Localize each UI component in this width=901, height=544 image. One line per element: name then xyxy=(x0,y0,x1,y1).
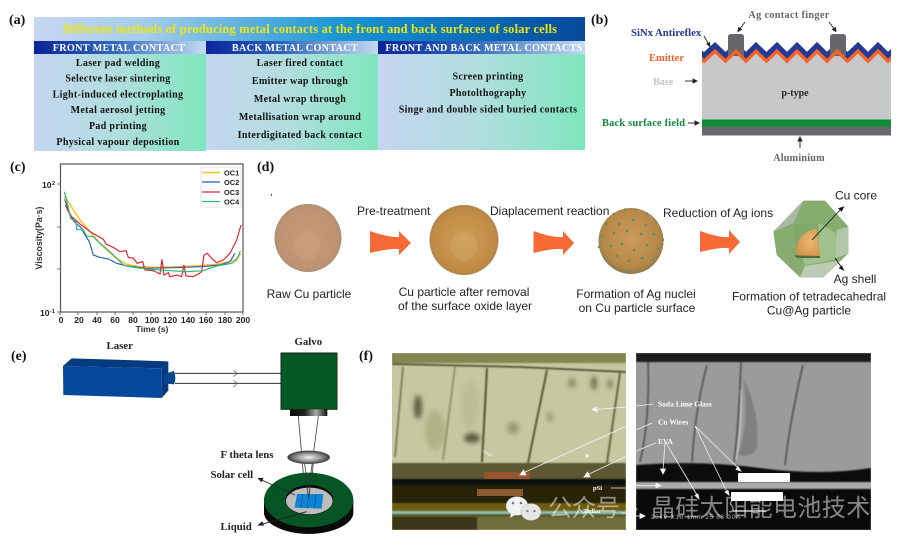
column: front metal contact: Pad printing xyxy=(89,121,147,132)
particle captions: Cu particle after removal xyxy=(399,285,529,299)
column: back metal contact: Metallisation wrap around xyxy=(239,112,361,123)
plot frame and ticks xyxy=(57,164,243,315)
column: back metal contact: BACK METAL CONTACT xyxy=(232,43,358,54)
column: back metal contact: Interdigitated back contact xyxy=(238,130,363,141)
callout arrows on particle xyxy=(812,207,844,270)
contact fingers xyxy=(728,34,846,56)
panel: Cu@Ag particle formation xyxy=(267,187,886,318)
back surface field layer xyxy=(702,120,891,126)
curve OC3 xyxy=(65,205,241,277)
Cu wire cross-sections xyxy=(731,473,790,501)
x-axis tick labels: 80 xyxy=(128,315,138,325)
label: Back surface field: Back surface field xyxy=(602,118,685,129)
particle captions: of the surface oxide layer xyxy=(398,299,532,313)
x-axis tick labels: 40 xyxy=(92,315,102,325)
column: back metal contact: Metal wrap through xyxy=(254,94,346,105)
chart legend: OC2 xyxy=(224,178,239,187)
left image callouts xyxy=(519,406,626,514)
panel label: (a): (a) xyxy=(9,13,26,28)
panel label: (c): (c) xyxy=(10,160,26,175)
particle captions: Formation of tetradecahedral xyxy=(732,290,886,304)
setup labels: Liquid xyxy=(220,521,252,533)
column: front metal contact: Metal aerosol jetting xyxy=(71,105,165,116)
panel: viscosity chart xyxy=(34,164,250,334)
setup labels: Solar cell xyxy=(210,469,253,481)
image labels: Soda Lime Glass xyxy=(658,400,712,408)
callout arrows xyxy=(685,22,836,148)
label: pSi: pSi xyxy=(593,485,602,492)
right image callouts xyxy=(636,404,766,518)
table title band xyxy=(34,17,585,41)
x-axis tick labels: 140 xyxy=(181,315,195,325)
panel: methods table xyxy=(34,17,585,151)
particle captions: Ag shell xyxy=(834,272,876,286)
label: SiNx: SiNx Antireflex xyxy=(631,27,702,39)
particle captions: Cu core xyxy=(835,188,877,202)
label: Ag contact finger: Ag contact finger xyxy=(748,10,830,21)
converging beams xyxy=(298,416,318,498)
chart legend: OC1 xyxy=(224,168,239,178)
x-axis tick labels: 180 xyxy=(218,315,232,325)
chart legend: OC4 xyxy=(224,198,240,206)
image labels xyxy=(658,400,712,446)
panel label: (e): (e) xyxy=(11,349,27,364)
cleaned Cu particle xyxy=(430,205,498,275)
F theta lens xyxy=(287,451,330,464)
particle captions xyxy=(267,188,886,318)
icon: WeChat xyxy=(506,496,541,520)
setup labels: Laser xyxy=(106,340,133,352)
watermark text: 公众号 xyxy=(548,495,620,522)
image labels: EVA xyxy=(658,437,673,446)
setup labels: Galvo xyxy=(294,336,322,348)
y-axis tick labels: 10 xyxy=(40,308,50,318)
column: front and back metal contacts: Screen printing xyxy=(452,72,524,82)
arrow: reduction of Ag ions xyxy=(700,230,740,254)
tetradecahedral particle xyxy=(773,201,848,277)
aluminium layer xyxy=(702,126,891,136)
panel label: (f): (f) xyxy=(359,349,373,364)
stray tick mark: , xyxy=(270,187,273,198)
copper wires xyxy=(477,472,530,496)
stage callout arrows xyxy=(258,478,307,525)
chart legend: OC3 xyxy=(224,188,239,197)
chart legend xyxy=(201,167,241,207)
curve OC2 xyxy=(65,199,235,268)
y-axis tick labels: -1 xyxy=(50,309,55,315)
particle captions: Raw Cu particle xyxy=(267,287,352,301)
column: back metal contact: Emitter wap through xyxy=(252,76,348,87)
panel: laser setup xyxy=(63,336,353,534)
column: front and back metal contacts: FRONT AND BACK METAL CONTACTS xyxy=(385,43,583,54)
laser head xyxy=(63,358,175,398)
base layer xyxy=(702,54,891,120)
panel: solar cell cross-section xyxy=(602,10,898,164)
setup labels xyxy=(106,336,322,533)
particle captions: Formation of Ag nuclei xyxy=(576,287,696,301)
watermark text: 晶硅太阳能电池技术 xyxy=(651,495,871,522)
watermark text: · xyxy=(632,495,640,522)
column: front metal contact xyxy=(34,41,206,151)
column: back metal contact: Laser fired contact xyxy=(257,58,344,69)
SEM scale readout: 20kV X18 1mm 25 63 30A xyxy=(651,515,741,521)
laser beams xyxy=(175,370,281,387)
y-axis title: Viscosity(Pa·s) xyxy=(34,206,44,269)
curve OC1 xyxy=(64,197,241,267)
image labels: Cu Wires xyxy=(658,418,688,426)
column: back metal contact xyxy=(206,41,378,150)
setup labels: F theta lens xyxy=(220,449,273,461)
x-axis tick labels: 60 xyxy=(110,315,120,325)
panel: SEM micrograph xyxy=(636,353,871,530)
raw Cu particle xyxy=(274,204,342,272)
x-axis title: Time (s) xyxy=(136,324,169,334)
column: front metal contact: Laser pad welding xyxy=(76,58,160,69)
step labels: Reduction of Ag ions xyxy=(663,206,773,220)
arrow: displacement reaction xyxy=(534,231,574,255)
step labels xyxy=(357,204,773,220)
panel label: (d): (d) xyxy=(257,160,274,175)
data curves xyxy=(64,192,241,277)
particle captions: Cu@Ag particle xyxy=(767,304,851,318)
sample stage xyxy=(264,473,353,534)
particle with Ag nuclei xyxy=(598,208,664,274)
emitter layer xyxy=(692,51,898,61)
particle captions: on Cu particle surface xyxy=(579,301,696,315)
column: front and back metal contacts xyxy=(378,41,585,150)
table title band: Different methods of producing metal contacts at the front and back surfaces of solar cells xyxy=(63,22,557,36)
label: Aluminium: Aluminium xyxy=(773,153,825,164)
panel: optical micrograph xyxy=(392,353,640,530)
label: Tedlar: Tedlar xyxy=(583,508,601,515)
panel label: (b): (b) xyxy=(591,13,608,28)
y-axis tick labels: 10 xyxy=(42,180,52,190)
watermark xyxy=(506,495,871,522)
x-axis tick labels: 100 xyxy=(145,315,159,325)
label: Base: Base xyxy=(653,77,674,88)
label: p-type: p-type xyxy=(781,88,809,99)
curve OC4 xyxy=(64,192,240,272)
x-axis tick labels: 120 xyxy=(163,315,177,325)
column: front metal contact: FRONT METAL CONTACT xyxy=(53,43,185,54)
label: Emitter: Emitter xyxy=(649,53,684,64)
column: front and back metal contacts: Photolthography xyxy=(449,88,527,99)
step labels: Diaplacement reaction xyxy=(490,204,609,218)
step labels: Pre-treatment xyxy=(357,204,431,218)
x-axis tick labels: 20 xyxy=(74,315,84,325)
x-axis tick labels: 0 xyxy=(59,315,64,325)
column: front metal contact: Light-induced electroplating xyxy=(53,90,183,100)
column: front and back metal contacts: Singe and double sided buried contacts xyxy=(399,104,577,116)
column: front metal contact: Selectve laser sintering xyxy=(65,74,171,84)
y-axis tick labels: 2 xyxy=(52,181,55,187)
galvo box xyxy=(281,353,337,416)
x-axis tick labels: 200 xyxy=(236,315,250,325)
antireflective layer xyxy=(692,46,898,56)
x-axis tick labels: 160 xyxy=(199,315,213,325)
arrow: pre-treatment xyxy=(370,231,411,255)
column: front metal contact: Physical vapour deposition xyxy=(56,137,180,148)
